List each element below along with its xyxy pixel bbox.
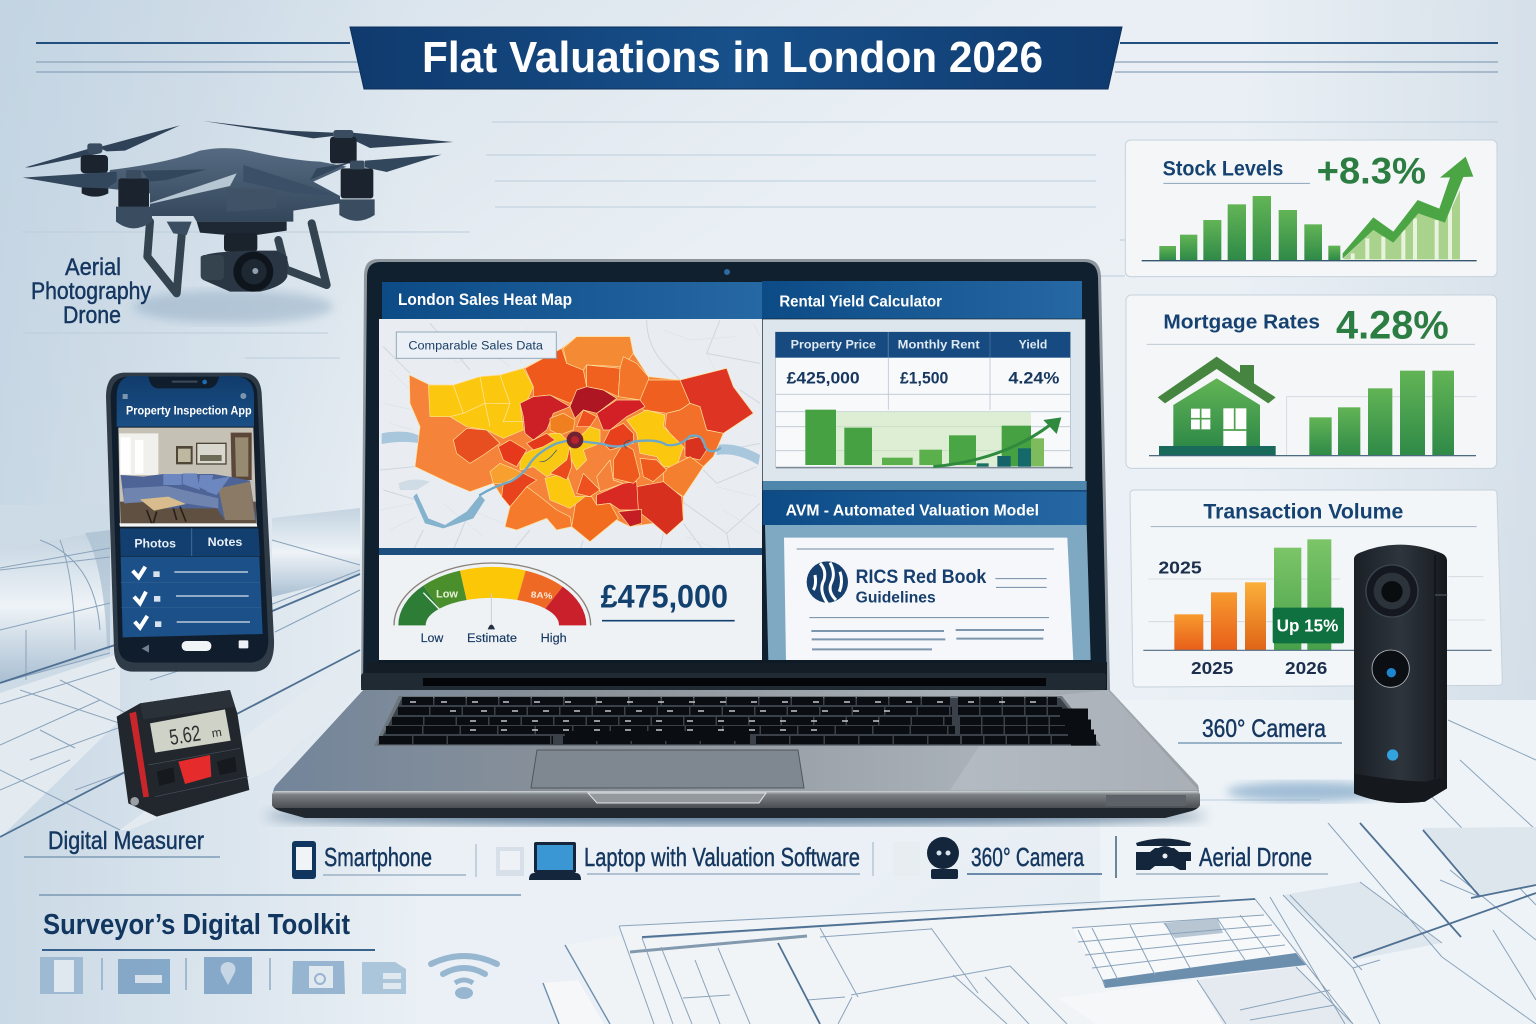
gauge arcs <box>398 586 440 625</box>
city marker <box>567 432 583 448</box>
keyboard <box>374 696 1101 746</box>
screen bezel <box>361 259 1110 690</box>
stat: +8.3% <box>1317 149 1426 191</box>
nav bar <box>142 640 248 653</box>
digital measurer: m <box>211 725 223 740</box>
bars <box>1159 196 1340 260</box>
front motors <box>116 161 375 228</box>
card: stock levels: Stock Levels <box>1163 157 1283 181</box>
yield table <box>775 332 1071 467</box>
card: mortgage rates: Mortgage Rates <box>1163 311 1320 333</box>
footer heading: surveyor's digital toolkit: Surveyor’s Digital Toolkit <box>43 909 350 941</box>
roads <box>380 320 760 550</box>
comparable sales tag <box>396 332 556 358</box>
label: aerial photography drone <box>31 254 151 329</box>
card: transaction volume <box>1130 490 1502 687</box>
icon: 360 camera <box>927 837 959 879</box>
panel: valuation gauge: High <box>541 631 567 645</box>
panel: valuation gauge: 8A% <box>531 589 553 601</box>
callout: up 15%: Up 15% <box>1277 616 1338 636</box>
heat map <box>380 320 760 550</box>
smartphone <box>106 373 274 672</box>
rics document: RICS Red Book <box>856 567 987 588</box>
rear motors <box>81 130 357 197</box>
yield table: Yield <box>1019 337 1047 351</box>
panel: automated valuation model: AVM - Automated Valuation Model <box>786 502 1039 519</box>
callout: up 15% <box>1273 608 1344 643</box>
icon: drone <box>1136 838 1191 870</box>
card: transaction volume: 2025 <box>1158 557 1202 577</box>
thames <box>480 436 720 495</box>
label: digital measurer: Digital Measurer <box>48 827 204 855</box>
gauge labels: Low <box>421 631 444 645</box>
panel: london sales heat map <box>379 282 762 550</box>
tool strip: aerial drone <box>1116 836 1328 878</box>
legs <box>147 222 327 293</box>
app title: Property Inspection App <box>126 403 252 417</box>
room photo <box>118 428 257 527</box>
yield table: Property Price <box>791 337 876 351</box>
faded toolkit icons <box>40 956 497 999</box>
panel: rental yield calculator: Rental Yield Calculator <box>779 294 942 311</box>
front propellers <box>23 155 442 188</box>
laptop <box>266 259 1206 825</box>
trackpad <box>531 750 804 788</box>
laptop base <box>273 688 1199 795</box>
boroughs <box>409 337 753 542</box>
bottom blueprint sheets <box>543 823 1536 1024</box>
bars <box>1149 371 1477 456</box>
card: transaction volume: 2025 <box>1191 658 1233 678</box>
rics crest <box>807 561 848 603</box>
yield table: Monthly Rent <box>898 337 980 351</box>
gimbal camera <box>224 233 257 252</box>
rics document: Guidelines <box>856 590 936 607</box>
label: aerial photography drone: Photography <box>31 278 151 305</box>
card: mortgage rates: 4.28% <box>1336 303 1449 347</box>
yield table: 4.24% <box>1008 368 1060 387</box>
card: transaction volume: 2026 <box>1285 658 1327 678</box>
label: aerial photography drone: Aerial <box>65 254 121 281</box>
card: stock levels <box>1125 140 1497 277</box>
tabs: Notes <box>208 535 243 549</box>
trend arrow <box>1343 157 1473 259</box>
card: mortgage rates <box>1126 295 1497 468</box>
tool strip: smartphone: Smartphone <box>324 842 432 872</box>
tabs <box>120 528 260 556</box>
panel: valuation gauge <box>379 548 762 660</box>
floor blueprint <box>1430 720 1536 940</box>
drone body <box>107 148 347 222</box>
comparable sales tag: Comparable Sales Data <box>408 338 543 352</box>
blueprint rolls <box>0 508 360 838</box>
tool strip: aerial drone: Aerial Drone <box>1199 842 1312 872</box>
tool strip: 360 camera: 360° Camera <box>971 842 1084 872</box>
house icon <box>1158 357 1276 455</box>
drone <box>23 121 453 323</box>
icon: laptop <box>529 842 581 880</box>
yield table: £425,000 <box>787 368 860 387</box>
icon: smartphone <box>292 841 316 879</box>
360 camera <box>1227 545 1447 803</box>
yield chart <box>776 410 1073 468</box>
panel: valuation gauge: Low <box>436 588 458 600</box>
digital measurer <box>117 690 249 817</box>
checklist <box>121 557 263 637</box>
panel: valuation gauge: Estimate <box>467 631 517 645</box>
title: Flat Valuations in London 2026 <box>422 33 1043 82</box>
label: 360 camera: 360° Camera <box>1202 715 1326 743</box>
yield table: £1,500 <box>900 368 948 387</box>
tabs: Photos <box>134 536 176 550</box>
panel: london sales heat map: London Sales Heat Map <box>398 290 572 309</box>
rics document <box>784 538 1073 661</box>
title banner <box>36 27 1498 89</box>
rear propellers <box>25 121 453 167</box>
panel: rental yield calculator <box>762 281 1085 481</box>
estimate value: £475,000 <box>601 578 728 614</box>
panel header <box>382 282 762 319</box>
panel: automated valuation model <box>763 481 1091 661</box>
tool strip: 360 camera <box>927 837 1102 879</box>
tool strip: smartphone <box>292 841 466 879</box>
reading: 5.62 <box>168 720 202 750</box>
label: aerial photography drone: Drone <box>63 302 121 329</box>
tool strip: laptop with valuation software <box>476 842 920 880</box>
column chart <box>1143 539 1492 650</box>
tool strip: laptop with valuation software: Laptop with Valuation Software <box>584 842 860 872</box>
card: transaction volume: Transaction Volume <box>1203 499 1403 523</box>
